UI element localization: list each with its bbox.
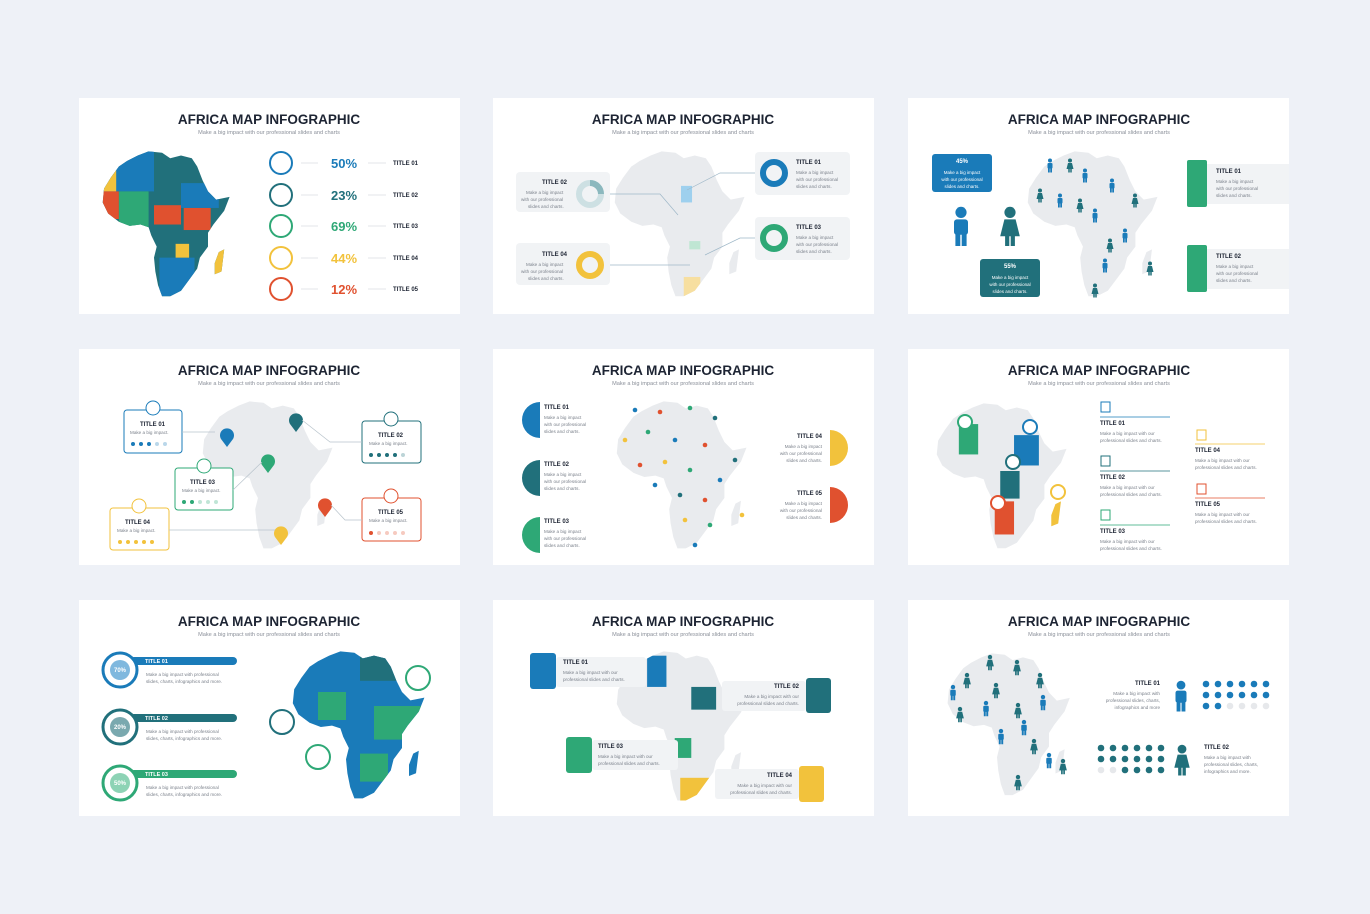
boxes: professional slides and charts. [563,677,625,682]
right items: TITLE 04 [797,434,823,440]
left items: Make a big impact [544,472,582,477]
right panels: slides and charts. [1216,193,1252,198]
title: AFRICA MAP INFOGRAPHIC [592,363,774,378]
gray map [615,151,744,296]
title: AFRICA MAP INFOGRAPHIC [592,614,774,629]
slide 2: map with donuts [493,98,874,314]
left panels: Make a big impact [526,190,564,195]
right panels: TITLE 01 [1216,169,1242,175]
rows: icons, percentages, titles: TITLE 03 [393,224,419,230]
left items: with our professional [544,422,586,427]
subtitle: Make a big impact with our professional slides and charts [198,381,340,387]
left items [522,402,586,553]
gray map [203,401,332,548]
boxes: professional slides and charts. [730,790,792,795]
right panels: Make a big impact [1216,179,1254,184]
rows: slides, charts, infographics and more. [146,679,222,684]
map with people [948,653,1070,795]
rows: TITLE 03 [145,772,168,778]
right panels: slides and charts. [1216,278,1252,283]
boxes: TITLE 03 [598,744,624,750]
45% box: with our professional [941,177,983,182]
right items: with our professional [780,451,822,456]
right items [780,430,848,523]
boxes: TITLE 04 [767,773,793,779]
right panels: Make a big impact [796,235,834,240]
slide 6: highlighted countries [908,349,1289,565]
right items: Make a big impact [785,501,823,506]
rows: icons, percentages, titles: 69% [331,219,357,234]
rows: icons, percentages, titles: TITLE 04 [393,256,419,262]
slide 4: pins: Make a big impact. [369,441,408,446]
rows: icons, percentages, titles: TITLE 02 [393,193,419,199]
left panels: slides and charts. [528,204,564,209]
right items: slides and charts. [786,515,822,520]
slide 3: gender [908,98,1289,314]
map with people [1028,151,1157,298]
slide 4: pins: Make a big impact. [182,488,221,493]
title: AFRICA MAP INFOGRAPHIC [1008,112,1190,127]
title: AFRICA MAP INFOGRAPHIC [178,363,360,378]
rows: icons, percentages, titles: 44% [331,251,357,266]
left items: TITLE 03 [544,519,570,525]
boxes: Make a big impact with our [744,694,799,699]
text columns: TITLE 05 [1195,502,1221,508]
slide 4: pins: TITLE 01 [140,422,166,428]
left panels: Make a big impact [526,262,564,267]
boxes: TITLE 01 [563,660,589,666]
title: AFRICA MAP INFOGRAPHIC [1008,363,1190,378]
text columns: TITLE 03 [1100,529,1126,535]
dotted map [617,401,746,548]
pins [169,413,362,545]
text columns: TITLE 02 [1100,475,1126,481]
right panels: with our professional [1216,186,1258,191]
text columns: TITLE 01 [1100,421,1126,427]
left items: Make a big impact [544,529,582,534]
rows: Make a big impact with professional [146,785,219,790]
people icons [954,207,1020,246]
title 01 block: Make a big impact with [1113,691,1160,696]
rows: icons, percentages, titles: TITLE 01 [393,161,419,167]
55% box: with our professional [989,282,1031,287]
slide 4: pins: TITLE 05 [378,510,404,516]
right panels: Make a big impact [1216,264,1254,269]
left panels: TITLE 02 [542,180,568,186]
right panels [755,152,850,260]
right panels: TITLE 03 [796,225,822,231]
text columns: professional slides and charts. [1100,546,1162,551]
text columns: Make a big impact with our [1100,539,1155,544]
subtitle: Make a big impact with our professional slides and charts [1028,381,1170,387]
55% box: Make a big impact [992,275,1029,280]
title 02 block: Make a big impact with [1204,755,1251,760]
right panels: TITLE 01 [796,160,822,166]
boxes: professional slides and charts. [598,761,660,766]
rows: 20% [114,725,127,731]
slide 4: pins: Make a big impact. [130,430,169,435]
rows: 70% [114,668,127,674]
rows: icons, percentages, titles [270,152,419,300]
subtitle: Make a big impact with our professional slides and charts [1028,130,1170,136]
text columns: professional slides and charts. [1100,438,1162,443]
blue/green map [270,650,430,798]
right panels: slides and charts. [796,249,832,254]
55% box [980,259,1040,297]
rows [103,653,237,800]
right items: slides and charts. [786,458,822,463]
left items: Make a big impact [544,415,582,420]
left items: with our professional [544,536,586,541]
left items: slides and charts. [544,486,580,491]
gray map [617,651,746,803]
colored africa map [100,150,230,299]
text columns: TITLE 04 [1195,448,1221,454]
right panels [1187,160,1289,292]
title: AFRICA MAP INFOGRAPHIC [1008,614,1190,629]
text columns [1100,402,1265,551]
title 02 block [1098,745,1258,776]
45% box: 45% [956,159,969,165]
title 02 block: professional slides, charts, [1204,762,1258,767]
text columns: Make a big impact with our [1100,431,1155,436]
rows: icons, percentages, titles: 50% [331,156,357,171]
rows: TITLE 02 [145,716,168,722]
title: AFRICA MAP INFOGRAPHIC [178,112,360,127]
slide 8: country highlights with icons [493,600,874,816]
slide 4: pins: Make a big impact. [369,518,408,523]
slide 9: people population [908,600,1289,816]
slide 4: pins: Make a big impact. [117,528,156,533]
rows: icons, percentages, titles: 23% [331,188,357,203]
left items: slides and charts. [544,429,580,434]
title 01 block: professional slides, charts, [1106,698,1160,703]
slide 4: pins [79,349,460,565]
rows: slides, charts, infographics and more. [146,792,222,797]
subtitle: Make a big impact with our professional slides and charts [612,381,754,387]
left panels: slides and charts. [528,276,564,281]
rows: slides, charts, infographics and more. [146,736,222,741]
text columns: professional slides and charts. [1100,492,1162,497]
title 01 block: TITLE 01 [1135,681,1161,687]
rows: Make a big impact with professional [146,672,219,677]
boxes [110,410,421,550]
text columns: Make a big impact with our [1100,485,1155,490]
slide 4: pins: TITLE 04 [125,520,151,526]
rows: icons, percentages, titles: TITLE 05 [393,287,419,293]
45% box: slides and charts. [944,184,980,189]
left panels: with our professional [521,197,563,202]
slide 1: colored map with percentages [79,98,460,314]
right panels: slides and charts. [796,184,832,189]
left items: slides and charts. [544,543,580,548]
left items: with our professional [544,479,586,484]
45% box: Make a big impact [944,170,981,175]
boxes: Make a big impact with our [598,754,653,759]
boxes: TITLE 02 [774,684,800,690]
right panels: TITLE 02 [1216,254,1242,260]
text columns: Make a big impact with our [1195,458,1250,463]
boxes [530,653,831,802]
55% box: 55% [1004,264,1017,270]
subtitle: Make a big impact with our professional slides and charts [198,130,340,136]
rows: TITLE 01 [145,659,168,665]
rows: Make a big impact with professional [146,729,219,734]
subtitle: Make a big impact with our professional slides and charts [612,130,754,136]
text columns: professional slides and charts. [1195,519,1257,524]
text columns: Make a big impact with our [1195,512,1250,517]
subtitle: Make a big impact with our professional slides and charts [612,632,754,638]
left panels: TITLE 04 [542,252,568,258]
boxes: professional slides and charts. [737,701,799,706]
slide 7: progress rings [79,600,460,816]
55% box: slides and charts. [992,289,1028,294]
left panels: with our professional [521,269,563,274]
subtitle: Make a big impact with our professional slides and charts [198,632,340,638]
right panels: with our professional [796,242,838,247]
right panels: Make a big impact [796,170,834,175]
right items: Make a big impact [785,444,823,449]
slide 4: pins: TITLE 02 [378,433,404,439]
right items: TITLE 05 [797,491,823,497]
title: AFRICA MAP INFOGRAPHIC [178,614,360,629]
right panels: with our professional [1216,271,1258,276]
map with highlights [937,403,1066,548]
slide 5: dots map [493,349,874,565]
text columns: professional slides and charts. [1195,465,1257,470]
left panels [516,172,610,285]
boxes: Make a big impact with our [737,783,792,788]
title 02 block: infographics and more. [1204,769,1251,774]
left items: TITLE 02 [544,462,570,468]
boxes: Make a big impact with our [563,670,618,675]
45% box [932,154,992,192]
right panels: with our professional [796,177,838,182]
rows: 50% [114,781,127,787]
slide 4: pins: TITLE 03 [190,480,216,486]
title 01 block [1106,681,1269,712]
title 01 block: infographics and more [1115,705,1160,710]
title 02 block: TITLE 02 [1204,745,1230,751]
right items: with our professional [780,508,822,513]
rows: icons, percentages, titles: 12% [331,282,357,297]
subtitle: Make a big impact with our professional slides and charts [1028,632,1170,638]
left items: TITLE 01 [544,405,570,411]
title: AFRICA MAP INFOGRAPHIC [592,112,774,127]
